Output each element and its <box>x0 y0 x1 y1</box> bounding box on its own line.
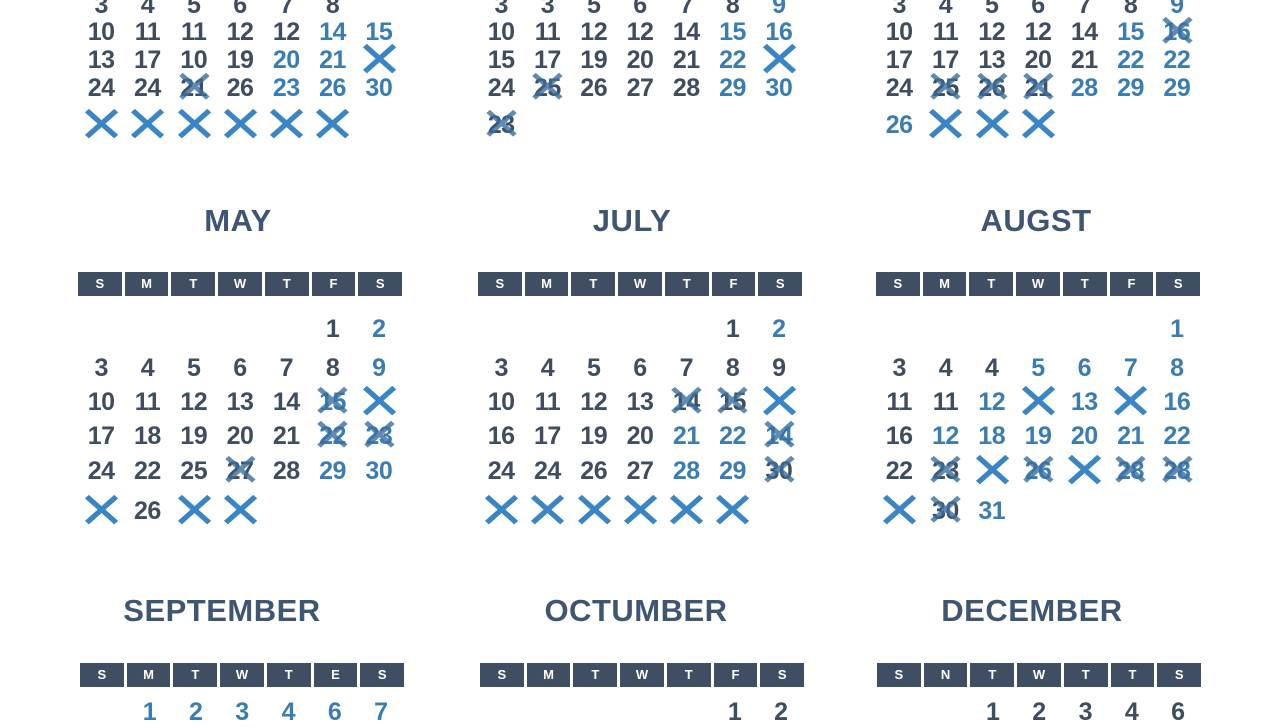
text: 17 <box>88 422 115 450</box>
text: 11 <box>135 18 160 46</box>
text: 4 <box>985 354 998 382</box>
text: 11 <box>933 18 958 46</box>
text: 1 <box>143 698 156 726</box>
text: 28 <box>673 457 700 485</box>
text: 6 <box>1171 698 1185 726</box>
text: 6 <box>1078 354 1091 382</box>
text: ✕ <box>170 96 217 153</box>
text: 26 <box>1025 457 1051 485</box>
text: 21 <box>319 46 346 74</box>
text: T <box>285 667 293 682</box>
text: 27 <box>627 74 653 102</box>
text: ✕ <box>478 482 525 539</box>
text: 7 <box>374 698 388 726</box>
text: 15 <box>719 388 746 416</box>
text: 28 <box>673 74 700 102</box>
text: 21 <box>1025 74 1051 102</box>
text: 22 <box>886 457 913 485</box>
text: 1 <box>1170 315 1184 343</box>
text: ✕ <box>922 96 969 153</box>
text: 16 <box>765 18 792 46</box>
text: 3 <box>494 354 508 382</box>
text: 16 <box>1163 18 1190 46</box>
text: 11 <box>886 388 912 416</box>
text: 13 <box>978 46 1005 74</box>
panel: top-middle month (partial) <box>486 0 802 139</box>
text: 2 <box>189 698 202 726</box>
text: 17 <box>932 46 959 74</box>
text: W <box>634 276 646 291</box>
text: 30 <box>365 457 392 485</box>
text: 24 <box>534 457 561 485</box>
panel: May <box>78 272 402 539</box>
text: ✕ <box>876 482 923 539</box>
text: 17 <box>134 46 161 74</box>
text: ✕ <box>78 96 125 153</box>
text: 4 <box>939 354 952 382</box>
text: W <box>1032 276 1044 291</box>
text: 12 <box>1025 18 1051 46</box>
text: 22 <box>319 422 346 450</box>
text: 21 <box>1071 46 1098 74</box>
text: 12 <box>978 388 1005 416</box>
text: ✕ <box>355 31 402 88</box>
text: 23 <box>273 74 300 102</box>
text: 9 <box>372 354 386 382</box>
text: 29 <box>719 74 746 102</box>
text: 28 <box>273 457 300 485</box>
text: 7 <box>680 354 693 382</box>
text: 24 <box>886 74 913 102</box>
text: 8 <box>326 354 339 382</box>
text: T <box>591 667 599 682</box>
text: 19 <box>180 422 207 450</box>
text: 26 <box>886 111 913 139</box>
text: 10 <box>88 18 115 46</box>
text: 29 <box>319 457 346 485</box>
text: 22 <box>719 422 746 450</box>
text: S <box>776 276 784 291</box>
text: 4 <box>541 354 554 382</box>
text: 26 <box>227 74 253 102</box>
text: 28 <box>1071 74 1098 102</box>
text: 20 <box>227 422 253 450</box>
text: 4 <box>141 354 154 382</box>
text: ✕ <box>1107 373 1154 430</box>
text: 2 <box>372 315 386 343</box>
text: 12 <box>273 18 300 46</box>
text: 13 <box>227 388 253 416</box>
text: 12 <box>227 18 253 46</box>
text: 26 <box>580 457 607 485</box>
text: 8 <box>726 354 739 382</box>
text: 7 <box>280 354 293 382</box>
text: 21 <box>180 74 207 102</box>
text: 5 <box>187 354 200 382</box>
text: 11 <box>135 388 160 416</box>
text: 2 <box>772 315 786 343</box>
text: 14 <box>319 18 346 46</box>
text: M <box>143 667 154 682</box>
panel: September <box>80 663 404 726</box>
text: M <box>939 276 950 291</box>
text: 28 <box>1117 457 1144 485</box>
title: AUGST: AUGST <box>980 203 1092 238</box>
text: 13 <box>627 388 653 416</box>
text: 27 <box>627 457 653 485</box>
text: ✕ <box>524 482 571 539</box>
text: T <box>988 667 996 682</box>
title: OCTUMBER: OCTUMBER <box>544 593 728 628</box>
text: 5 <box>587 354 600 382</box>
text: 17 <box>886 46 913 74</box>
panel: top-right month (partial) <box>886 0 1192 153</box>
text: 25 <box>180 457 207 485</box>
text: ✕ <box>124 96 171 153</box>
text: 23 <box>365 422 392 450</box>
text: ✕ <box>170 482 217 539</box>
text: 17 <box>534 46 561 74</box>
text: 8 <box>1170 354 1184 382</box>
text: 20 <box>627 422 653 450</box>
text: 15 <box>365 18 392 46</box>
text: T <box>987 276 995 291</box>
text: 29 <box>1163 74 1190 102</box>
text: 20 <box>627 46 653 74</box>
text: 12 <box>580 388 607 416</box>
text: ✕ <box>570 482 617 539</box>
text: 3 <box>1079 698 1092 726</box>
text: M <box>543 667 554 682</box>
text: 16 <box>886 422 913 450</box>
text: 13 <box>88 46 115 74</box>
text: F <box>731 667 739 682</box>
text: ✕ <box>755 31 802 88</box>
title: MAY: MAY <box>204 203 272 238</box>
text: 19 <box>580 422 607 450</box>
text: 6 <box>328 698 341 726</box>
text: ✕ <box>217 96 263 153</box>
text: F <box>329 276 337 291</box>
text: N <box>941 667 950 682</box>
text: 5 <box>1031 354 1045 382</box>
text: 9 <box>772 354 786 382</box>
text: 14 <box>673 388 700 416</box>
text: W <box>1033 667 1045 682</box>
text: 16 <box>1163 388 1190 416</box>
text: 4 <box>1125 698 1138 726</box>
text: 22 <box>1117 46 1144 74</box>
title: DECEMBER: DECEMBER <box>941 593 1123 628</box>
text: 11 <box>933 388 958 416</box>
text: 1 <box>986 698 999 726</box>
text: S <box>1175 667 1184 682</box>
panel: July <box>478 272 802 539</box>
text: F <box>729 276 737 291</box>
text: S <box>1174 276 1182 291</box>
text: 6 <box>633 354 647 382</box>
text: 12 <box>627 18 653 46</box>
text: 25 <box>932 74 959 102</box>
text: T <box>683 276 691 291</box>
text: 24 <box>134 74 161 102</box>
text: ✕ <box>968 96 1015 153</box>
text: 14 <box>273 388 300 416</box>
text: 11 <box>535 388 560 416</box>
text: 12 <box>932 422 959 450</box>
text: 19 <box>1025 422 1051 450</box>
text: E <box>331 667 340 682</box>
text: T <box>1128 667 1136 682</box>
text: 16 <box>488 422 515 450</box>
title: JULY: JULY <box>593 203 671 238</box>
text: ✕ <box>968 442 1015 499</box>
text: 21 <box>273 422 300 450</box>
text: S <box>778 667 786 682</box>
text: 30 <box>765 74 792 102</box>
text: S <box>96 276 104 291</box>
text: 15 <box>488 46 515 74</box>
text: ✕ <box>78 482 125 539</box>
text: 2 <box>774 698 788 726</box>
text: 10 <box>88 388 115 416</box>
text: 15 <box>319 388 346 416</box>
text: ✕ <box>309 96 356 153</box>
text: 3 <box>94 354 108 382</box>
text: S <box>378 667 386 682</box>
text: 30 <box>765 457 792 485</box>
text: S <box>496 276 504 291</box>
text: 12 <box>580 18 607 46</box>
text: 21 <box>673 422 700 450</box>
text: T <box>1081 276 1089 291</box>
text: T <box>191 667 199 682</box>
panel: October <box>480 663 804 726</box>
text: 22 <box>1163 46 1190 74</box>
text: 3 <box>892 354 906 382</box>
text: 6 <box>233 354 247 382</box>
text: ✕ <box>1015 373 1061 430</box>
text: M <box>541 276 552 291</box>
text: 17 <box>534 422 561 450</box>
text: 19 <box>580 46 607 74</box>
text: 31 <box>978 497 1005 525</box>
text: 15 <box>1117 18 1144 46</box>
text: 30 <box>932 497 959 525</box>
panel: August <box>876 272 1200 539</box>
text: T <box>189 276 197 291</box>
text: 12 <box>180 388 207 416</box>
text: W <box>234 276 246 291</box>
text: 26 <box>580 74 607 102</box>
text: ✕ <box>1015 96 1061 153</box>
text: 22 <box>134 457 161 485</box>
text: ✕ <box>709 482 756 539</box>
text: 1 <box>726 315 739 343</box>
text: ✕ <box>1061 442 1108 499</box>
text: T <box>589 276 597 291</box>
text: ✕ <box>217 482 263 539</box>
text: S <box>894 276 902 291</box>
text: 15 <box>719 18 746 46</box>
text: 14 <box>673 18 700 46</box>
panel: top-left month (partial) <box>78 0 402 153</box>
text: S <box>98 667 106 682</box>
text: 13 <box>1071 388 1098 416</box>
text: 1 <box>728 698 741 726</box>
text: 20 <box>273 46 300 74</box>
text: ✕ <box>355 373 402 430</box>
text: S <box>498 667 506 682</box>
text: 26 <box>978 74 1005 102</box>
text: 18 <box>978 422 1005 450</box>
text: M <box>141 276 152 291</box>
text: ✕ <box>263 96 310 153</box>
text: 24 <box>88 74 115 102</box>
text: T <box>1082 667 1090 682</box>
text: 10 <box>488 388 515 416</box>
text: T <box>283 276 291 291</box>
text: 11 <box>181 18 206 46</box>
text: 30 <box>365 74 392 102</box>
text: 25 <box>534 74 561 102</box>
text: 27 <box>227 457 253 485</box>
text: 7 <box>1124 354 1137 382</box>
text: 28 <box>1163 457 1190 485</box>
text: 21 <box>673 46 700 74</box>
text: S <box>376 276 384 291</box>
text: 12 <box>978 18 1005 46</box>
text: 20 <box>1025 46 1051 74</box>
text: W <box>636 667 648 682</box>
text: 22 <box>719 46 746 74</box>
text: S <box>895 667 903 682</box>
text: 19 <box>227 46 253 74</box>
text: 18 <box>134 422 161 450</box>
text: 10 <box>488 18 515 46</box>
title: SEPTEMBER: SEPTEMBER <box>123 593 321 628</box>
text: ✕ <box>755 373 802 430</box>
text: 24 <box>88 457 115 485</box>
text: 14 <box>1071 18 1098 46</box>
text: 11 <box>535 18 560 46</box>
text: 1 <box>326 315 339 343</box>
text: W <box>236 667 248 682</box>
text: F <box>1127 276 1135 291</box>
text: ✕ <box>617 482 663 539</box>
text: 23 <box>488 111 515 139</box>
text: 14 <box>765 422 792 450</box>
panel: December <box>877 663 1201 726</box>
text: 29 <box>719 457 746 485</box>
text: 2 <box>1032 698 1046 726</box>
text: 3 <box>235 698 249 726</box>
text: 24 <box>488 457 515 485</box>
text: 20 <box>1071 422 1098 450</box>
text: 24 <box>488 74 515 102</box>
text: 23 <box>932 457 959 485</box>
text: 21 <box>1117 422 1144 450</box>
text: 10 <box>886 18 913 46</box>
text: T <box>685 667 693 682</box>
text: 29 <box>1117 74 1144 102</box>
text: 10 <box>180 46 207 74</box>
text: ✕ <box>663 482 710 539</box>
text: 22 <box>1163 422 1190 450</box>
text: 26 <box>319 74 346 102</box>
text: 4 <box>282 698 295 726</box>
text: 26 <box>134 497 161 525</box>
